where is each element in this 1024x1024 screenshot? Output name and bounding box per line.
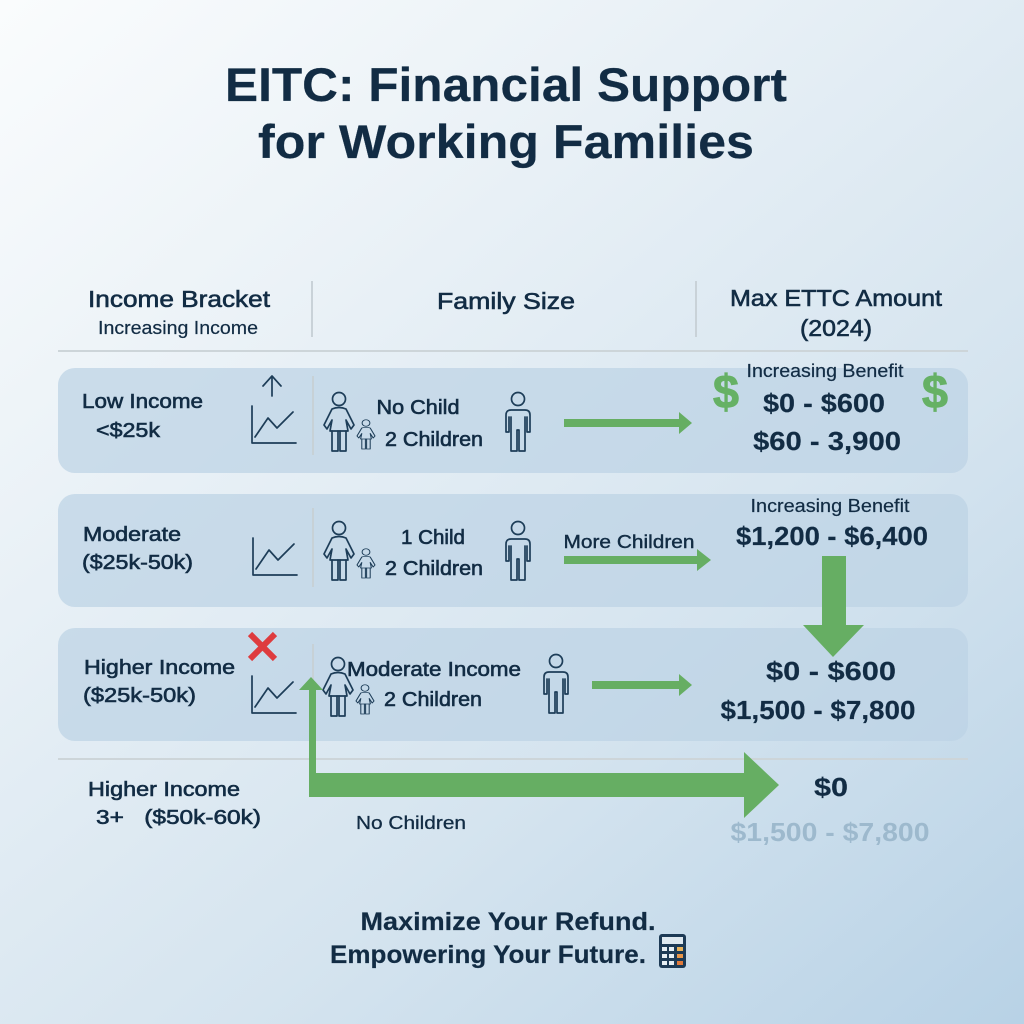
footer tagline: Maximize Your Refund. bbox=[360, 908, 656, 936]
no children label: No Children bbox=[356, 813, 466, 833]
family text: 1 Child bbox=[401, 527, 465, 549]
panel: moderate row bbox=[58, 494, 968, 607]
benefit label: Increasing Benefit bbox=[746, 361, 904, 381]
arrow bbox=[564, 412, 692, 434]
title bbox=[225, 58, 787, 168]
income label: Higher Income bbox=[84, 657, 235, 679]
row 2 contents: ($25k-50k) bbox=[82, 552, 193, 574]
arrow: down to higher income bbox=[803, 556, 864, 657]
row 3 contents: ($25k-50k) bbox=[83, 685, 196, 707]
heading: max amount: Max ETTC Amount bbox=[730, 285, 943, 311]
icon: adult bbox=[324, 392, 354, 451]
row 1 contents: $60 - 3,900 bbox=[753, 426, 901, 456]
family text: No Child bbox=[376, 397, 460, 419]
icon: dollar right: $ bbox=[922, 365, 948, 418]
footer tagline bbox=[330, 908, 656, 969]
icon: line chart bbox=[252, 676, 296, 713]
amounts: $0 - $600 bbox=[766, 656, 896, 686]
icon: adult bbox=[324, 522, 354, 580]
row 1 contents: <$25k bbox=[96, 420, 161, 442]
icon: child bbox=[357, 420, 375, 449]
row 4 contents bbox=[88, 772, 930, 847]
income label: Low Income bbox=[82, 391, 203, 413]
heading: income bracket: Income Bracket bbox=[88, 286, 271, 312]
icon: up arrow bbox=[263, 376, 281, 396]
icon: adult bbox=[323, 658, 353, 716]
icon: adult man bbox=[506, 392, 530, 451]
table header bbox=[88, 285, 943, 341]
row 2 contents bbox=[82, 496, 928, 580]
more children label: More Children bbox=[564, 531, 694, 552]
icon: line chart bbox=[252, 406, 296, 443]
icon: child bbox=[357, 549, 375, 578]
heading: year: (2024) bbox=[800, 315, 872, 341]
arrow bbox=[564, 549, 711, 571]
icon: adult man bbox=[506, 522, 530, 580]
row 3 contents bbox=[83, 634, 916, 725]
amount: $1,200 - $6,400 bbox=[736, 521, 928, 551]
icon: calculator bbox=[659, 934, 686, 968]
panel: higher income row bbox=[58, 628, 968, 741]
sub-heading: increasing income: Increasing Income bbox=[98, 318, 258, 338]
icon: line chart bbox=[253, 538, 297, 575]
row 2 contents: 2 Children bbox=[385, 558, 483, 580]
arrow bbox=[592, 674, 692, 696]
income label: Higher Income bbox=[88, 779, 240, 801]
row 4 contents: 3+ ($50k-60k) bbox=[96, 807, 261, 829]
family text: Moderate Income bbox=[347, 659, 521, 681]
arrow: L-shaped green flow bbox=[299, 677, 779, 818]
title: for Working Families bbox=[258, 115, 754, 168]
faded amount: $1,500 - $7,800 bbox=[730, 817, 930, 847]
icon: dollar left: $ bbox=[713, 365, 739, 418]
heading: family size: Family Size bbox=[437, 288, 575, 314]
benefit label: Increasing Benefit bbox=[750, 496, 910, 516]
row 1 contents: 2 Children bbox=[385, 429, 483, 451]
panel: low income row bbox=[58, 368, 968, 473]
icon: child bbox=[356, 685, 374, 714]
icon: adult man bbox=[544, 654, 568, 713]
amounts: $0 - $600 bbox=[763, 388, 885, 418]
row 3 contents: $1,500 - $7,800 bbox=[720, 695, 916, 725]
footer tagline: Empowering Your Future. bbox=[330, 941, 646, 969]
icon: red cross bbox=[250, 634, 275, 659]
row 3 contents: 2 Children bbox=[384, 689, 482, 711]
title: EITC: Financial Support bbox=[225, 58, 787, 111]
income label: Moderate bbox=[83, 524, 181, 546]
row 1 contents bbox=[82, 361, 948, 456]
amount: $0 bbox=[814, 772, 848, 802]
